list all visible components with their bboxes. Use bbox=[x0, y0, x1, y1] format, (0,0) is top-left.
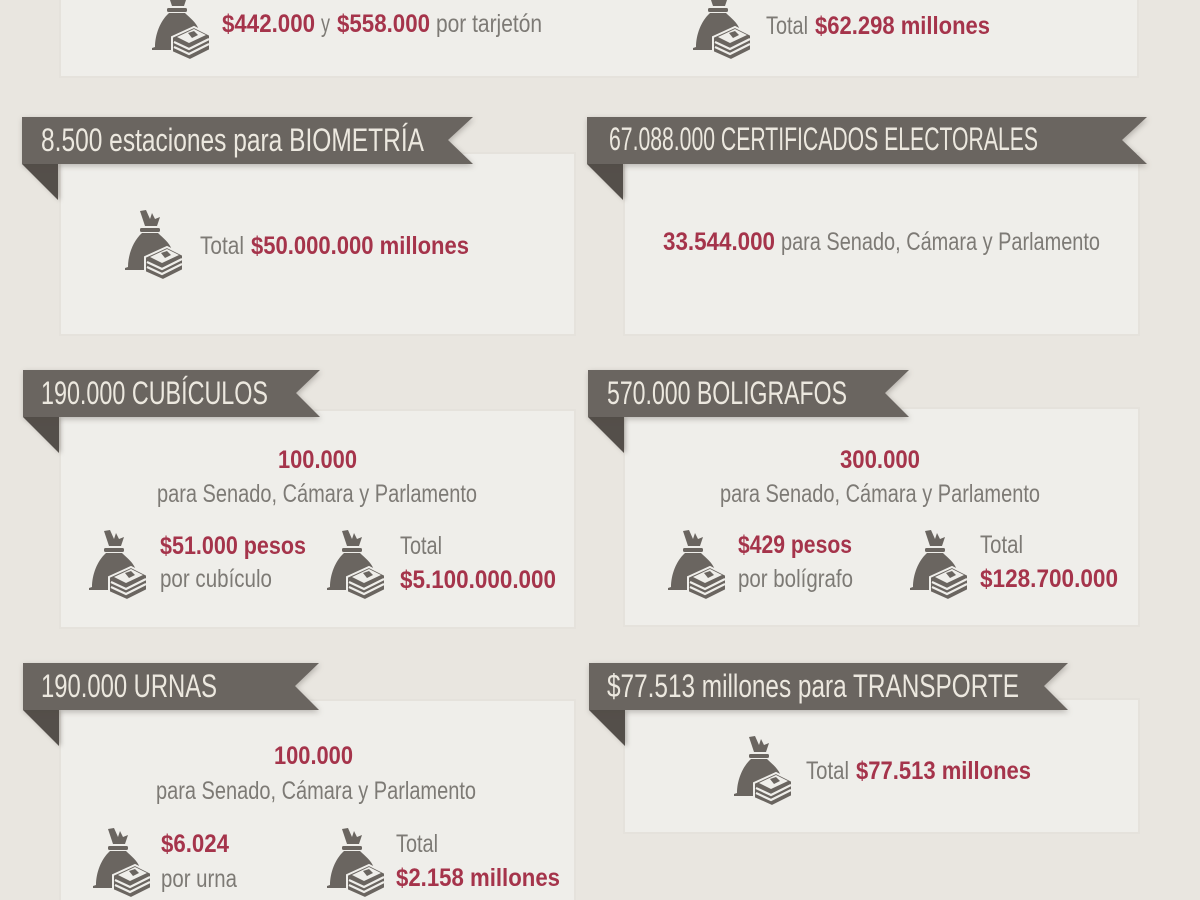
text: pen total: Total bbox=[980, 531, 1023, 559]
ribbon: bolígrafos heading bbox=[588, 370, 909, 453]
ribbon: cubículos heading bbox=[23, 370, 320, 453]
text: pen total: $128.700.000 bbox=[980, 565, 1118, 593]
ribbon: urnas heading bbox=[23, 663, 319, 746]
text: price per ballot bbox=[222, 10, 542, 38]
icon: money bag, tarjetón price bbox=[152, 0, 210, 60]
text: certificados detail: 33.544.000 bbox=[663, 228, 775, 256]
text: cubicle total bbox=[400, 532, 556, 594]
text: price per urn: $6.024 bbox=[161, 830, 229, 858]
panel: transporte bbox=[589, 663, 1139, 833]
icon: money bag, total bbox=[327, 828, 385, 898]
text: price per pen bbox=[738, 531, 853, 593]
text: price per cubicle: por cubículo bbox=[160, 565, 272, 593]
text: pen total bbox=[980, 531, 1118, 593]
icon: money bag, unit price bbox=[89, 530, 147, 600]
text: price per pen: por bolígrafo bbox=[738, 565, 853, 593]
text: urn total bbox=[396, 830, 560, 892]
text: cubículos quantity: 100.000 bbox=[278, 446, 357, 474]
text: cubicle total: Total bbox=[400, 532, 442, 560]
text: cubículos quantity bbox=[157, 446, 477, 508]
ribbon: bolígrafos heading: 570.000 BOLIGRAFOS bbox=[607, 375, 847, 411]
text: bolígrafos quantity: para Senado, Cámara y Parlamento bbox=[720, 480, 1040, 508]
icon: money bag, unit price bbox=[668, 530, 726, 600]
text: urn total: $2.158 millones bbox=[396, 864, 560, 892]
ribbon: biometría heading: 8.500 estaciones para BIOMETRÍA bbox=[41, 122, 425, 158]
text: bolígrafos quantity bbox=[720, 446, 1040, 508]
text: ballot total: $62.298 millones bbox=[815, 12, 990, 40]
panel: tarjetones (top) bbox=[60, 0, 1138, 77]
icon: money bag bbox=[734, 736, 792, 806]
text: cubículos quantity: para Senado, Cámara y Parlamento bbox=[157, 480, 477, 508]
text: ballot total: Total bbox=[766, 12, 808, 40]
icon: money bag, unit price bbox=[93, 828, 151, 898]
panel: certificados electorales bbox=[587, 117, 1147, 335]
text: bolígrafos quantity: 300.000 bbox=[840, 446, 920, 474]
ribbon: cubículos heading: 190.000 CUBÍCULOS bbox=[41, 375, 268, 411]
text: transporte total: Total bbox=[806, 757, 849, 785]
text: biometría total: Total bbox=[200, 232, 244, 260]
text: urnas quantity: 100.000 bbox=[274, 742, 353, 770]
text: biometría total: $50.000.000 millones bbox=[251, 232, 469, 260]
text: price per pen: $429 pesos bbox=[738, 531, 852, 559]
icon: money bag, total bbox=[910, 530, 968, 600]
icon: money bag, total bbox=[327, 530, 385, 600]
text: price per ballot: y bbox=[321, 10, 330, 38]
text: urnas quantity: para Senado, Cámara y Parlamento bbox=[156, 777, 476, 805]
panel: biometría bbox=[22, 117, 575, 335]
panel: bolígrafos bbox=[588, 370, 1139, 626]
ribbon: biometría heading bbox=[22, 117, 473, 200]
text: urn total: Total bbox=[396, 830, 438, 858]
text: price per ballot: por tarjetón bbox=[436, 10, 542, 38]
text: price per ballot: $442.000 bbox=[222, 10, 315, 38]
text: certificados detail bbox=[663, 228, 1100, 256]
panel: urnas bbox=[23, 663, 575, 900]
icon: money bag, tarjetón total bbox=[693, 0, 751, 60]
text: urnas quantity bbox=[156, 742, 476, 805]
icon: money bag bbox=[125, 210, 183, 280]
text: cubicle total: $5.100.000.000 bbox=[400, 566, 556, 594]
panel: cubículos bbox=[23, 370, 575, 628]
ribbon: certificados heading bbox=[587, 117, 1147, 200]
text: price per cubicle bbox=[160, 532, 306, 593]
text: price per urn bbox=[161, 830, 237, 893]
ribbon: transporte heading: $77.513 millones para TRANSPORTE bbox=[607, 668, 1019, 704]
text: transporte total: $77.513 millones bbox=[856, 757, 1031, 785]
text: price per cubicle: $51.000 pesos bbox=[160, 532, 306, 560]
ribbon: urnas heading: 190.000 URNAS bbox=[41, 668, 217, 704]
text: price per urn: por urna bbox=[161, 865, 237, 893]
ribbon: transporte heading bbox=[589, 663, 1068, 746]
text: certificados detail: para Senado, Cámara y Parlamento bbox=[781, 228, 1100, 256]
text: price per ballot: $558.000 bbox=[337, 10, 430, 38]
